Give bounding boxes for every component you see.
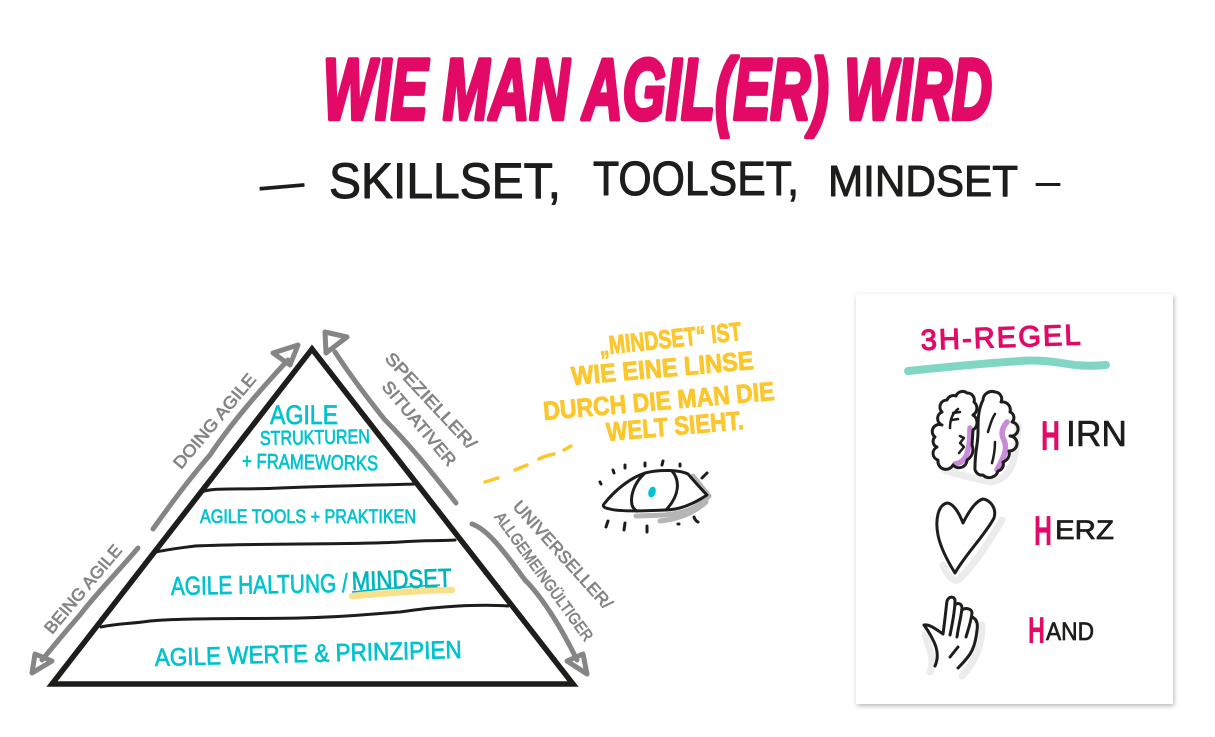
card heading: 3H-REGEL (920, 319, 1081, 357)
label: universeller / allgemeingueltiger: UNIVERSELLER/ (509, 497, 616, 613)
level text: agile tools und praktiken: AGILE TOOLS + PRAKTIKEN (200, 507, 416, 528)
subtitle (258, 153, 1060, 209)
card background (856, 294, 1173, 704)
arrow: being agile (32, 541, 138, 673)
arrow: universeller (472, 497, 616, 674)
dashed connector (485, 446, 571, 482)
pyramid outline (52, 349, 573, 684)
heart shadow (943, 520, 1002, 580)
label: hand: AND (1046, 618, 1094, 646)
subtitle: SKILLSET, (329, 153, 561, 209)
hand outline (924, 597, 977, 668)
eye outline (603, 470, 707, 511)
eye iris (632, 471, 677, 511)
heading underline (908, 360, 1106, 371)
highlighter: mindset (352, 590, 452, 596)
level text: agile haltung / mindset (171, 563, 452, 601)
subtitle: — (1036, 166, 1060, 199)
arrow: spezieller (325, 332, 480, 503)
label: hirn (1041, 412, 1127, 459)
panel: pyramid (52, 349, 573, 684)
callout: mindset quote: „MINDSET“ IST (597, 316, 743, 361)
label: herz (1034, 507, 1114, 554)
arrow: doing agile (153, 345, 298, 529)
brain right lobe (975, 391, 1018, 478)
pyramid level dividers (101, 484, 508, 627)
icon: heart (937, 499, 1002, 580)
level text: agile strukturen und frameworks: AGILE (270, 400, 338, 430)
label: hand (1028, 610, 1094, 651)
level text: agile haltung / mindset: MINDSET (351, 563, 452, 596)
panel: 3H-Regel card (856, 294, 1173, 704)
eye shadow (636, 476, 709, 521)
brain shadow (945, 425, 1018, 482)
label: hand: H (1028, 610, 1045, 651)
callout: mindset quote (542, 316, 776, 447)
eye lashes (600, 461, 707, 532)
hand shadow (925, 625, 982, 676)
brain left lobe (932, 391, 977, 469)
label: doing agile: DOING AGILE (170, 370, 260, 473)
level text: agile werte und prinzipien: AGILE WERTE & PRINZIPIEN (154, 636, 462, 672)
level text: agile haltung / mindset: AGILE HALTUNG / (171, 568, 349, 601)
label: being agile: BEING AGILE (41, 541, 126, 638)
label: spezieller / situativer: SPEZIELLER/ (381, 349, 480, 453)
brain folds (950, 409, 995, 463)
level text: agile strukturen und frameworks: STRUKTUREN (260, 426, 370, 450)
icon: brain (932, 391, 1018, 482)
eye pupil (647, 486, 657, 498)
heart outline (937, 499, 995, 573)
label: herz: H (1034, 507, 1052, 554)
label: spezieller / situativer: SITUATIVER (378, 377, 460, 470)
icon: eye (600, 461, 709, 532)
brain purple accent (955, 422, 1007, 470)
label: hirn: H (1041, 412, 1060, 459)
callout: mindset quote: WELT SIEHT. (605, 405, 745, 447)
icon: hand (924, 597, 982, 676)
label: spezieller / situativer (378, 349, 480, 470)
callout: mindset quote: DURCH DIE MAN DIE (542, 376, 776, 426)
label: herz: ERZ (1055, 515, 1114, 545)
subtitle: TOOLSET, (593, 153, 799, 206)
subtitle: MINDSET (828, 157, 1018, 206)
callout: mindset quote: WIE EINE LINSE (570, 345, 755, 391)
subtitle: — (258, 160, 306, 208)
level text: agile strukturen und frameworks: + FRAMEWORKS (242, 450, 378, 475)
label: universeller / allgemeingueltiger: ALLGEMEINGÜLTIGER (491, 509, 596, 645)
label: hirn: IRN (1066, 413, 1127, 454)
level text: agile strukturen und frameworks (242, 400, 378, 475)
